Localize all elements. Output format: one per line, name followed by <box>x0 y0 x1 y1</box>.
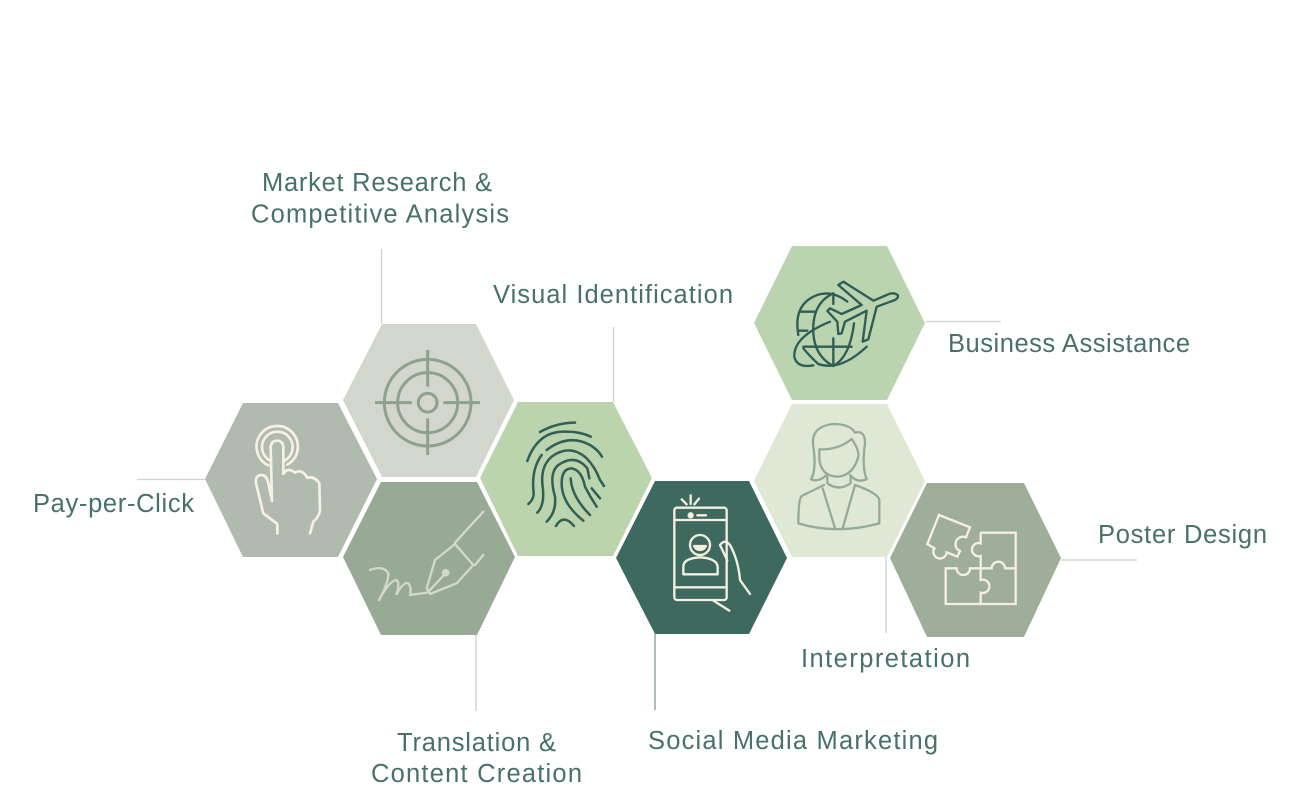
label: visual identification: Visual Identification <box>493 281 733 309</box>
connector: market research <box>380 249 382 324</box>
connector: pay-per-click <box>137 478 205 480</box>
label: social media marketing: Social Media Marketing <box>648 727 938 755</box>
icon: woman portrait <box>798 424 879 529</box>
label: poster design: Poster Design <box>1098 521 1267 549</box>
label: translation: Translation & <box>397 729 556 757</box>
icon: phone with profile <box>674 495 750 611</box>
label: market research: Market Research & <box>262 169 492 197</box>
connector: social media <box>654 634 656 710</box>
label: pay-per-click: Pay-per-Click <box>33 490 194 518</box>
label: competitive analysis: Competitive Analysis <box>251 200 509 228</box>
icon: globe and plane <box>794 282 898 366</box>
panel: visual identification hexagon <box>480 402 652 556</box>
panel: market research hexagon <box>343 324 514 477</box>
connector: visual identification <box>612 327 614 402</box>
panel: poster design hexagon <box>890 483 1061 637</box>
panel: pay-per-click hexagon <box>205 403 377 557</box>
icon: pointing hand <box>256 426 320 533</box>
icon: fingerprint <box>527 423 604 526</box>
icon: puzzle pieces <box>927 515 1016 604</box>
panel: social media hexagon <box>616 481 787 634</box>
label: business assistance: Business Assistance <box>948 330 1190 358</box>
label: interpretation: Interpretation <box>801 645 970 673</box>
panel: interpretation hexagon <box>754 404 925 557</box>
connector: translation <box>475 635 477 711</box>
panel: business assistance hexagon <box>754 246 925 400</box>
icon: fountain pen signature <box>370 512 483 600</box>
connector: poster design <box>1061 559 1137 561</box>
connector: business assistance <box>926 320 1001 322</box>
connector: interpretation <box>885 557 887 633</box>
panel: translation hexagon <box>343 482 515 635</box>
icon: target crosshair <box>375 350 480 455</box>
